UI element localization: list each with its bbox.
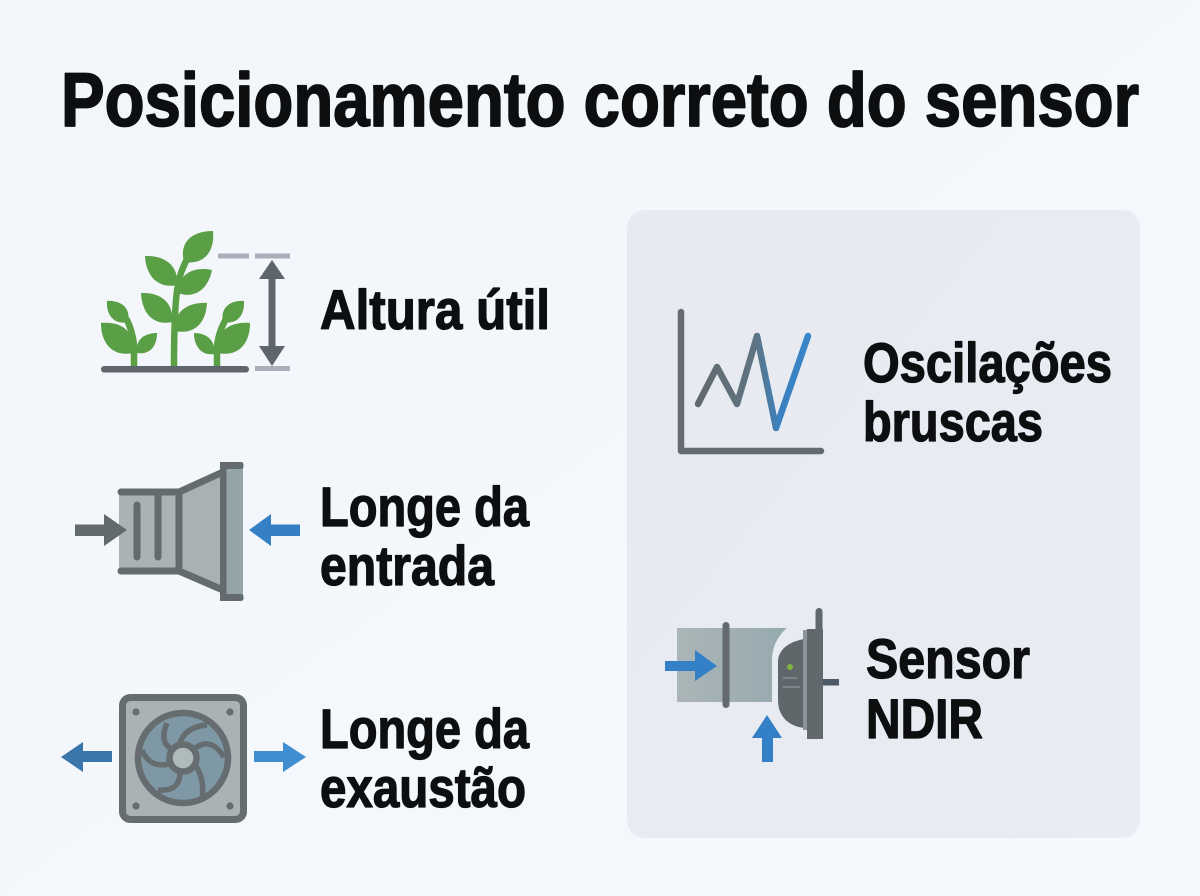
label: Longe da exaustão: exaustão	[320, 756, 526, 819]
item: Longe da exaustão	[61, 697, 530, 820]
label: Oscilações bruscas	[863, 331, 1112, 453]
arrow: inflow grey	[75, 514, 127, 546]
label: Longe da entrada: entrada	[320, 534, 495, 597]
label: Longe da exaustão: Longe da	[320, 697, 530, 760]
arrow: inflow blue	[249, 514, 300, 546]
label: Altura útil: Altura útil	[320, 278, 550, 341]
icon: plants with height arrow	[101, 231, 290, 372]
arrow: airflow right	[665, 650, 717, 681]
item: Longe da entrada	[75, 462, 530, 601]
label: Oscilações bruscas: Oscilações	[863, 331, 1112, 394]
arrow: exhaust right	[254, 742, 306, 772]
arrow: airflow up	[752, 715, 782, 762]
label: Sensor NDIR: NDIR	[866, 687, 983, 750]
panel: sensor conditions	[627, 210, 1140, 838]
label: Sensor NDIR	[866, 627, 1030, 750]
label: Sensor NDIR: Sensor	[866, 627, 1030, 690]
icon: air intake duct	[119, 462, 244, 601]
label: Longe da entrada: Longe da	[320, 475, 530, 538]
label: Oscilações bruscas: bruscas	[863, 390, 1043, 453]
arrow: exhaust left	[61, 742, 112, 772]
icon: oscillation chart	[681, 312, 821, 451]
label: Longe da entrada	[320, 475, 530, 597]
icon: NDIR sensor	[677, 608, 839, 739]
label: Longe da exaustão	[320, 697, 530, 819]
item: Altura útil	[101, 231, 550, 372]
icon: exhaust fan	[122, 698, 244, 820]
